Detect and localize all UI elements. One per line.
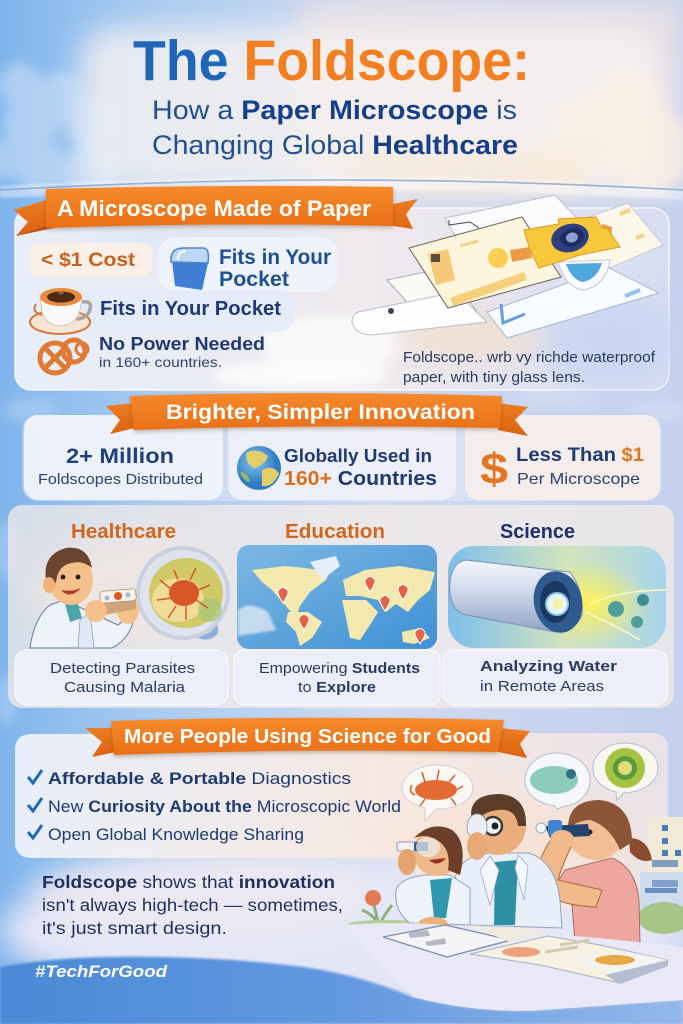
caption bbox=[234, 650, 440, 705]
front sheet bbox=[409, 217, 561, 308]
illustration: doctor bbox=[30, 548, 139, 648]
closing statement: Foldscope shows that innovation bbox=[42, 872, 335, 892]
orange tab bbox=[510, 224, 612, 262]
building bbox=[638, 817, 683, 934]
subtitle: How a Paper Microscope is bbox=[152, 95, 517, 125]
ribbon heading bbox=[14, 186, 418, 236]
person: right girl in pink bbox=[535, 800, 652, 944]
title: Changing Global Healthcare bbox=[152, 130, 518, 160]
caption bbox=[443, 650, 667, 705]
ribbon: brighter, simpler innovation: Brighter, Simpler Innovation bbox=[166, 401, 475, 424]
icon: globe bbox=[237, 446, 281, 490]
illustration: world map bbox=[237, 545, 437, 649]
heading: Education bbox=[285, 521, 385, 543]
ribbon: brighter, simpler innovation bbox=[106, 393, 528, 436]
icon: magnifier with parasite bbox=[138, 548, 228, 638]
open notebook right bbox=[470, 936, 668, 984]
caption: in Remote Areas bbox=[480, 678, 604, 695]
caption: Causing Malaria bbox=[64, 679, 186, 696]
stat: 2+ million: 2+ Million bbox=[66, 445, 174, 468]
heading: Healthcare bbox=[71, 521, 176, 543]
row: fits in your pocket with coffee cup: Fits in Your Pocket bbox=[100, 298, 281, 320]
row: no power needed: No Power Needed bbox=[99, 334, 265, 354]
person: left girl bbox=[396, 826, 470, 931]
card: science bbox=[443, 521, 667, 705]
bubble: green cell bbox=[525, 753, 590, 809]
row: no power needed bbox=[40, 334, 265, 373]
panel: a microscope made of paper bbox=[14, 186, 680, 390]
stat: countries with globe: Globally Used in bbox=[284, 445, 432, 466]
closing statement: isn't always high-tech — sometimes, bbox=[42, 895, 343, 915]
illustration: microscope lens and water bbox=[448, 546, 666, 648]
stat: countries with globe: 160+ Countries bbox=[284, 468, 437, 490]
panel: science for good backdrop bbox=[15, 733, 668, 910]
caption: to Explore bbox=[298, 679, 376, 696]
illustration caption: paper, with tiny glass lens. bbox=[403, 370, 585, 386]
lens bbox=[548, 220, 592, 256]
white handle bbox=[352, 292, 487, 335]
chip: fits in your pocket, box icon: Fits in Your bbox=[219, 246, 331, 269]
illustration: scientists looking through foldscopes bbox=[345, 743, 683, 1011]
closing statement bbox=[42, 872, 343, 938]
chip: under $1 cost: < $1 Cost bbox=[41, 250, 136, 271]
stat: countries with globe bbox=[228, 415, 456, 500]
hashtag: #TechForGood bbox=[35, 962, 168, 981]
title line 1: The Foldscope: bbox=[133, 29, 530, 93]
icon: pocket box bbox=[171, 248, 208, 290]
icon: dollar: $ bbox=[480, 445, 508, 494]
icon: crossed rings bbox=[40, 340, 88, 373]
speech bubbles bbox=[402, 743, 658, 821]
item: diagnostics: Affordable & Portable Diagnostics bbox=[48, 770, 351, 788]
title bbox=[133, 29, 530, 160]
stat: 2+ million: Foldscopes Distributed bbox=[38, 472, 203, 488]
ribbon: more people using science for good bbox=[85, 718, 530, 758]
heading: Science bbox=[500, 521, 575, 543]
blue shield window bbox=[558, 260, 610, 290]
illustration caption: Foldscope.. wrb vy richde waterproof bbox=[403, 350, 656, 366]
card: healthcare bbox=[15, 521, 228, 705]
back sheets bbox=[387, 195, 663, 338]
caption: Detecting Parasites bbox=[50, 660, 195, 677]
caption bbox=[15, 650, 228, 705]
person: boy in lab coat bbox=[455, 794, 562, 928]
ribbon heading: A Microscope Made of Paper bbox=[57, 196, 371, 221]
bubble: red parasite bbox=[402, 765, 473, 821]
panel: use cases bbox=[8, 505, 674, 708]
bubble: yellow-green cell bbox=[593, 743, 658, 800]
stat: less than $1 bbox=[465, 415, 660, 500]
checklist bbox=[28, 770, 401, 844]
flower bbox=[348, 890, 432, 928]
row: fits in your pocket with coffee cup bbox=[30, 288, 294, 334]
open notebook left bbox=[383, 925, 548, 957]
illustration caption bbox=[403, 350, 656, 386]
icon: coffee cup bbox=[30, 288, 90, 334]
item: curiosity: New Curiosity About the Microscopic World bbox=[48, 798, 401, 816]
caption: Empowering Students bbox=[259, 660, 420, 677]
illustration: paper foldscope bbox=[352, 195, 663, 338]
stat: 2+ million bbox=[24, 415, 223, 500]
ribbon: more people using science for good: More People Using Science for Good bbox=[124, 726, 491, 748]
chip: fits in your pocket, box icon bbox=[158, 237, 338, 292]
chip: under $1 cost bbox=[29, 243, 152, 277]
row: no power needed: in 160+ countries. bbox=[99, 355, 222, 370]
bottom wave bbox=[0, 957, 683, 1024]
stat: less than $1: Less Than $1 bbox=[516, 445, 644, 466]
stats panel row bbox=[22, 415, 662, 501]
table surface bbox=[345, 923, 683, 1011]
stat: less than $1: Per Microscope bbox=[517, 471, 640, 488]
item: knowledge sharing: Open Global Knowledge Sharing bbox=[48, 826, 304, 844]
card: education bbox=[234, 521, 440, 705]
closing statement: it's just smart design. bbox=[42, 918, 227, 938]
yellow slider bbox=[524, 217, 620, 268]
chip: fits in your pocket, box icon: Pocket bbox=[219, 268, 289, 291]
caption: Analyzing Water bbox=[480, 658, 617, 675]
